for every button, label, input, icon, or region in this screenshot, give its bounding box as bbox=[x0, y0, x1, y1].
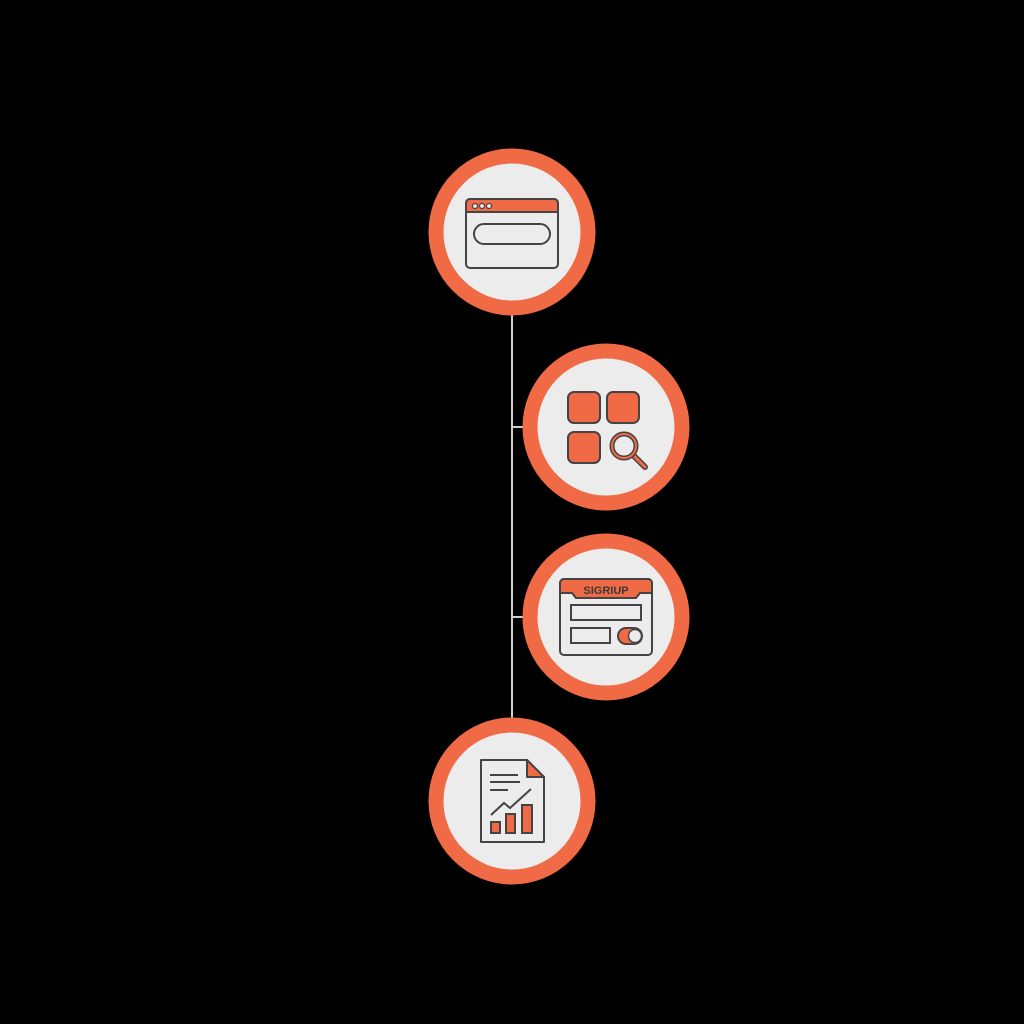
step 4: report document icon bbox=[436, 725, 588, 877]
step 1: browser window icon bbox=[436, 156, 588, 308]
connector line bbox=[512, 312, 526, 722]
step 3: signup form icon: SIGRIUP bbox=[583, 585, 629, 597]
step 3: signup form icon bbox=[530, 541, 682, 693]
step 2: grid search icon bbox=[530, 351, 682, 503]
